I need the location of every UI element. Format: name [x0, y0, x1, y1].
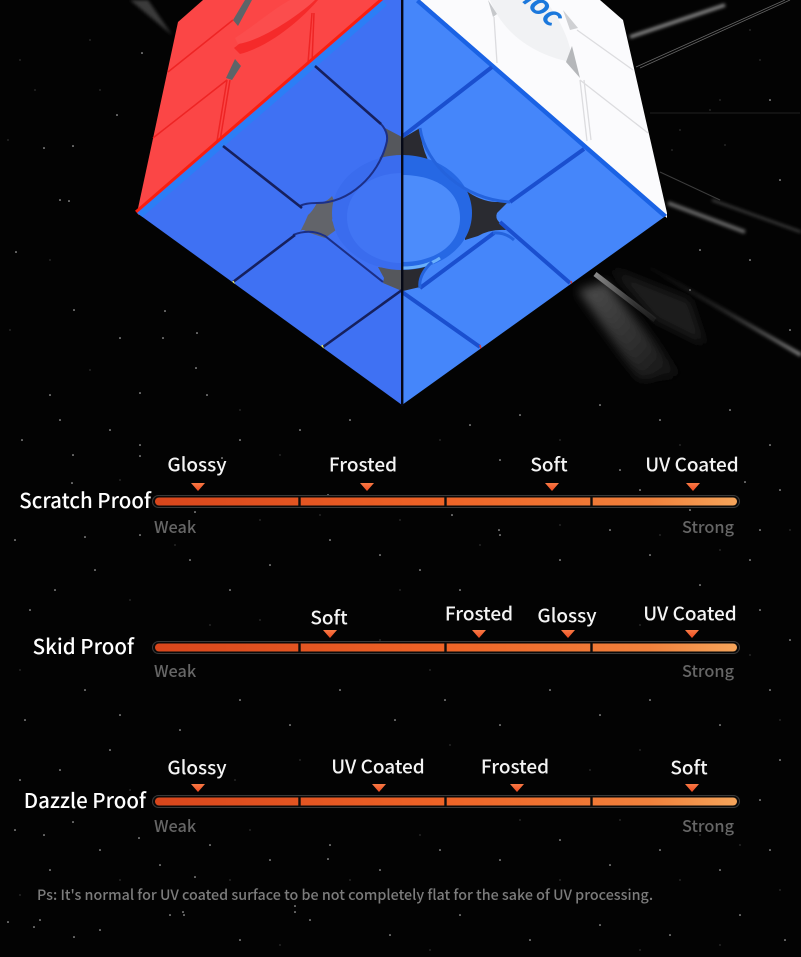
scale ends: Weak	[154, 514, 197, 538]
material labels	[310, 600, 737, 630]
row label: Scratch Proof	[19, 484, 152, 514]
groove tips	[233, 281, 324, 351]
divider line	[401, 0, 403, 406]
scale ends: Weak	[154, 813, 197, 837]
scale bar	[152, 642, 740, 654]
center gaps right	[403, 128, 428, 160]
center gaps left	[300, 196, 336, 238]
markers	[323, 630, 699, 638]
light streaks	[130, 0, 801, 380]
scale bar	[152, 496, 740, 508]
grooves left	[223, 66, 402, 347]
material labels: Frosted	[329, 450, 397, 478]
row label: Skid Proof	[33, 630, 135, 660]
upper left sticker round	[300, 123, 387, 206]
chart: Scratch Proof	[19, 450, 740, 538]
scale ends	[154, 813, 735, 837]
chart: Skid Proof	[33, 600, 740, 682]
edge highlights	[139, 3, 385, 216]
material labels	[167, 752, 708, 780]
scale ends: Weak	[154, 658, 197, 682]
material labels: Frosted	[481, 752, 549, 780]
material labels: UV Coated	[643, 600, 737, 626]
markers	[191, 784, 699, 792]
material labels: Soft	[530, 450, 568, 478]
scale ends: Strong	[682, 514, 735, 538]
scale ends: Strong	[682, 813, 735, 837]
scale ends	[154, 514, 735, 538]
material labels: UV Coated	[645, 450, 739, 478]
row label: Dazzle Proof	[24, 784, 147, 814]
lower left sticker round	[293, 232, 383, 282]
chart: Dazzle Proof	[24, 752, 740, 837]
scale ends	[154, 658, 735, 682]
material labels: Glossy	[537, 602, 597, 628]
red face	[137, 0, 385, 213]
material labels: Glossy	[167, 450, 227, 478]
material labels: Frosted	[445, 600, 513, 626]
blue right half	[402, 0, 672, 410]
center cap	[332, 155, 402, 270]
material labels: Soft	[310, 604, 348, 630]
white face	[420, 0, 667, 218]
material labels: UV Coated	[331, 752, 425, 780]
blue face	[130, 0, 672, 410]
scale ends: Strong	[682, 658, 735, 682]
material labels: Glossy	[167, 754, 227, 780]
scale bar	[152, 796, 740, 808]
material labels	[167, 450, 739, 478]
white cap	[490, 0, 572, 62]
blue left half	[130, 0, 402, 410]
material labels: Soft	[670, 754, 708, 780]
footnote: Ps: It's normal for UV coated surface to be not completely flat for the sake of UV processing.	[37, 884, 653, 905]
grooves right	[402, 67, 584, 347]
markers	[191, 483, 700, 491]
red face ridges	[153, 13, 314, 141]
cube	[130, 0, 672, 410]
